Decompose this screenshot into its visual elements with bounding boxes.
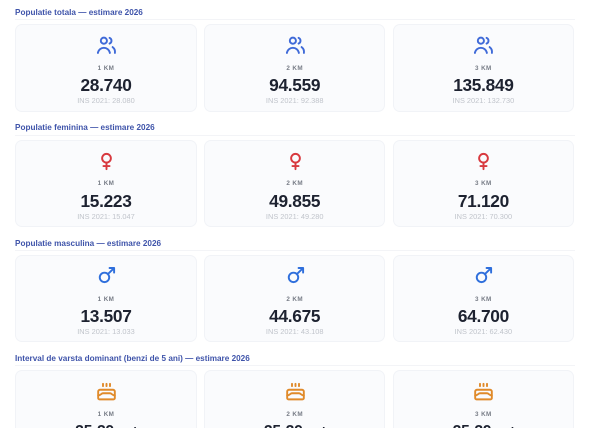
panel: total population 3 km: INS 2021: 132.730 [453, 96, 514, 105]
heading: female population: Populatie feminina — estimare 2026 [15, 123, 155, 132]
panel: total population 3 km [393, 24, 574, 112]
icon: male symbol [476, 267, 492, 284]
panel: female population 3 km [393, 140, 574, 227]
panel: total population 1 km [15, 24, 197, 112]
panel: male population 1 km: INS 2021: 13.033 [77, 327, 135, 336]
panel: dominant age 2 km [204, 370, 385, 428]
panel: male population 3 km: INS 2021: 62.430 [455, 327, 512, 336]
panel: female population 3 km: 3 KM [475, 180, 492, 187]
panel: male population 2 km: 2 KM [286, 296, 303, 302]
panel: male population 1 km: 1 KM [98, 296, 114, 302]
panel: male population 2 km: INS 2021: 43.108 [266, 327, 323, 336]
panel: dominant age 1 km [15, 370, 197, 428]
panel: male population 1 km: 13.507 [80, 306, 132, 326]
panel: female population 1 km: 1 KM [98, 180, 114, 187]
panel: male population 2 km: 44.675 [269, 306, 320, 326]
panel: total population 2 km: INS 2021: 92.388 [266, 96, 323, 105]
panel: dominant age 3 km: 3 KM [475, 411, 492, 418]
icon: male symbol [288, 267, 304, 284]
panel: male population 1 km [15, 255, 197, 342]
icon: birthday cake [286, 382, 305, 400]
panel: total population 3 km: 135.849 [453, 75, 514, 95]
panel: total population 2 km: 2 KM [286, 65, 303, 72]
icon: people [474, 36, 493, 54]
icon: birthday cake [97, 382, 116, 400]
panel: total population 2 km: 94.559 [269, 75, 320, 95]
panel: female population 3 km: 71.120 [458, 190, 509, 210]
panel: female population 2 km [204, 140, 385, 227]
icon: female symbol [478, 152, 489, 170]
panel: female population 1 km [15, 140, 197, 227]
panel: female population 1 km: 15.223 [80, 190, 132, 210]
panel: male population 2 km [204, 255, 385, 342]
panel: dominant age 1 km: 1 KM [98, 411, 114, 418]
icon: male symbol [98, 267, 116, 284]
icon: birthday cake [474, 382, 493, 400]
icon: female symbol [290, 152, 301, 170]
panel: total population 1 km: 28.740 [80, 75, 132, 95]
icon: people [96, 36, 116, 54]
panel: female population 3 km: INS 2021: 70.300 [455, 212, 512, 220]
panel: male population 3 km: 3 KM [475, 296, 492, 302]
panel: dominant age 2 km: 2 KM [286, 411, 303, 418]
icon: people [286, 36, 305, 54]
panel: total population 1 km: 1 KM [98, 65, 114, 72]
panel: total population 1 km: INS 2021: 28.080 [77, 96, 135, 105]
panel: female population 2 km: INS 2021: 49.280 [266, 212, 323, 220]
panel: female population 1 km: INS 2021: 15.047 [77, 212, 135, 220]
panel: dominant age 3 km [393, 370, 574, 428]
heading: male population: Populatie masculina — estimare 2026 [15, 238, 161, 248]
panel: male population 3 km [393, 255, 574, 342]
heading: dominant age band: Interval de varsta dominant (benzi de 5 ani) — estimare 2026 [15, 354, 250, 362]
panel: female population 2 km: 49.855 [269, 190, 320, 210]
icon: female symbol [101, 152, 112, 170]
panel: total population 3 km: 3 KM [475, 65, 492, 72]
panel: male population 3 km: 64.700 [458, 306, 509, 326]
heading: total population: Populatie totala — estimare 2026 [15, 8, 143, 16]
panel: total population 2 km [204, 24, 385, 112]
panel: female population 2 km: 2 KM [286, 180, 303, 187]
